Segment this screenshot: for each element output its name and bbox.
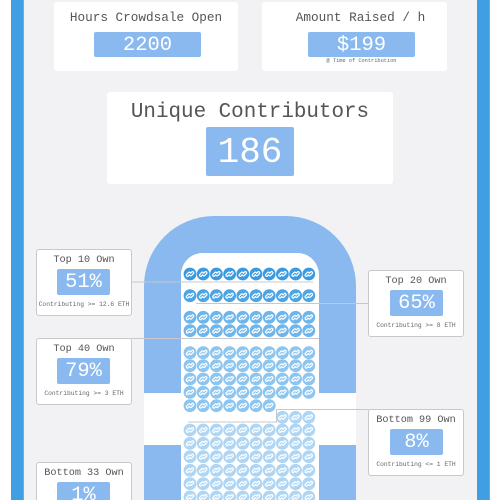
value: $199: $199 xyxy=(337,34,386,57)
callout label: Top 40 Own xyxy=(53,344,115,355)
callout: top 10 own xyxy=(36,249,132,316)
panel: unique contributors xyxy=(107,92,393,184)
funnel arch shape xyxy=(144,216,356,500)
callout value: 8% xyxy=(404,431,429,454)
callout note: Contributing >= 8 ETH xyxy=(376,322,456,329)
icons: middle contributors xyxy=(184,346,315,412)
note: time of contribution: @ Time of Contribution xyxy=(327,58,396,64)
callout note: Contributing <= 1 ETH xyxy=(376,461,456,468)
value: 2200: 2200 xyxy=(123,34,172,57)
icons: top 40 contributors xyxy=(184,311,315,337)
left blue stripe xyxy=(11,0,24,500)
callout value xyxy=(57,358,110,384)
panel: amount raised per hour xyxy=(262,2,447,71)
callout: bottom 33 own xyxy=(36,462,132,500)
callout: top 20 own xyxy=(368,270,464,337)
callout value: 65% xyxy=(398,292,435,315)
value: 186: 186 xyxy=(218,132,282,173)
callout value xyxy=(57,482,110,500)
heading: hours crowdsale open: Hours Crowdsale Open xyxy=(70,10,222,25)
callout label: Bottom 33 Own xyxy=(44,468,124,479)
value: 186 xyxy=(206,127,294,176)
callout label: Top 10 Own xyxy=(53,255,115,266)
callout: bottom 99 own xyxy=(368,409,464,476)
heading: unique contributors: Unique Contributors xyxy=(131,101,369,124)
icons: bottom 99 contributors xyxy=(184,411,315,500)
icons: top 10 contributors xyxy=(184,268,315,280)
callout value: 51% xyxy=(65,271,102,294)
heading: amount raised per hour: Amount Raised / h xyxy=(296,10,425,25)
right blue stripe xyxy=(477,0,490,500)
panel: hours crowdsale open xyxy=(54,2,238,71)
callout value xyxy=(57,269,110,295)
callout note: Contributing >= 3 ETH xyxy=(44,390,124,397)
callout label: Bottom 99 Own xyxy=(376,415,456,426)
icons: top 20 contributors xyxy=(184,289,315,302)
callout: top 40 own xyxy=(36,338,132,405)
callout label: Top 20 Own xyxy=(385,276,447,287)
callout note: Contributing >= 12.6 ETH xyxy=(39,301,129,308)
callout value xyxy=(390,290,443,316)
callout value xyxy=(390,429,443,455)
callout value: 79% xyxy=(65,360,102,383)
value: $199 xyxy=(308,32,415,57)
leader lines xyxy=(131,282,369,422)
value: 2200 xyxy=(94,32,201,57)
